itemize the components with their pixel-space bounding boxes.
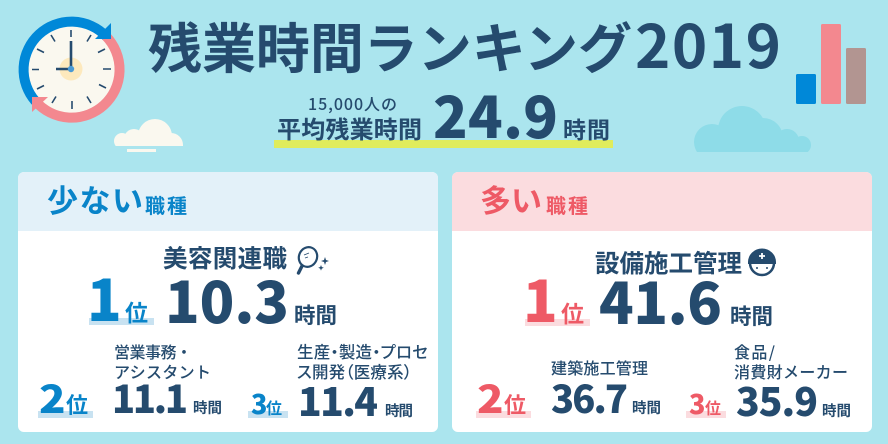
rank 3: 時間: [822, 400, 851, 421]
average overtime callout: [274, 73, 613, 155]
rank 3: 食品/: [734, 339, 775, 363]
heading: fewer: 職種: [145, 190, 187, 219]
rank 1: 時間: [730, 300, 773, 331]
average overtime callout: 24.9: [433, 73, 558, 155]
rank 3: 位: [705, 395, 721, 419]
rank 2: 営業事務・: [114, 339, 192, 363]
rank 2: 2: [39, 369, 66, 424]
rank 1: 10.3: [165, 258, 289, 340]
rank 1: 美容関連職: [163, 240, 288, 275]
rank 1: 1: [523, 257, 558, 339]
icon: white cloud: [114, 119, 183, 152]
average overtime callout: 時間: [563, 111, 610, 145]
icon: hand mirror: [296, 244, 329, 273]
rank 3: ス開発（医療系）: [297, 359, 412, 383]
heading: more: 職種: [546, 190, 588, 219]
rank 1: 41.6: [599, 259, 722, 341]
rank 3: [686, 339, 851, 428]
rank 1: 位: [125, 294, 148, 328]
icon: bar chart: [796, 24, 866, 104]
rank 3: 35.9: [736, 372, 818, 428]
rank 3: 生産・製造・プロセ: [297, 339, 428, 363]
title: 2019: [635, 0, 781, 86]
rank 2: 2: [477, 369, 504, 424]
rank 1: [87, 240, 337, 340]
rank 3: 3: [689, 383, 705, 422]
rank 2: 36.7: [551, 369, 628, 424]
rank 2: 11.1: [112, 369, 188, 424]
icon: helmet: [748, 248, 776, 275]
rank 1: 位: [561, 295, 584, 329]
average overtime callout: 15,000人の: [308, 91, 397, 115]
rank 2: 位: [504, 388, 526, 420]
icon: blue cloud: [694, 106, 811, 152]
title: 残業時間ランキング: [148, 5, 632, 84]
rank 3: 位: [266, 395, 282, 419]
rank 2: [476, 355, 661, 424]
heading: fewer: 少ない: [47, 176, 143, 221]
rank 3: 消費財メーカー: [734, 359, 848, 383]
icon: clock: [24, 22, 120, 118]
heading: more: 多い: [480, 176, 542, 221]
panel: fewer hours: [18, 172, 438, 432]
rank 1: 1: [87, 256, 122, 338]
rank 2: 時間: [632, 397, 661, 418]
rank 3: 時間: [385, 400, 413, 421]
rank 3: 3: [251, 383, 267, 422]
rank 2: [38, 339, 222, 424]
heading: fewer: [47, 176, 187, 221]
rank 1: 設備施工管理: [595, 245, 742, 280]
rank 1: [523, 245, 773, 341]
rank 2: 建築施工管理: [551, 355, 648, 379]
rank 3: [248, 339, 428, 428]
rank 2: 時間: [193, 397, 222, 418]
rank 1: 時間: [294, 299, 337, 330]
panel: more hours: [452, 172, 872, 432]
rank 2: 位: [66, 388, 88, 420]
rank 3: 11.4: [298, 372, 378, 428]
heading: more: [480, 176, 588, 221]
rank 2: アシスタント: [114, 359, 211, 383]
average overtime callout: 平均残業時間: [277, 110, 422, 145]
